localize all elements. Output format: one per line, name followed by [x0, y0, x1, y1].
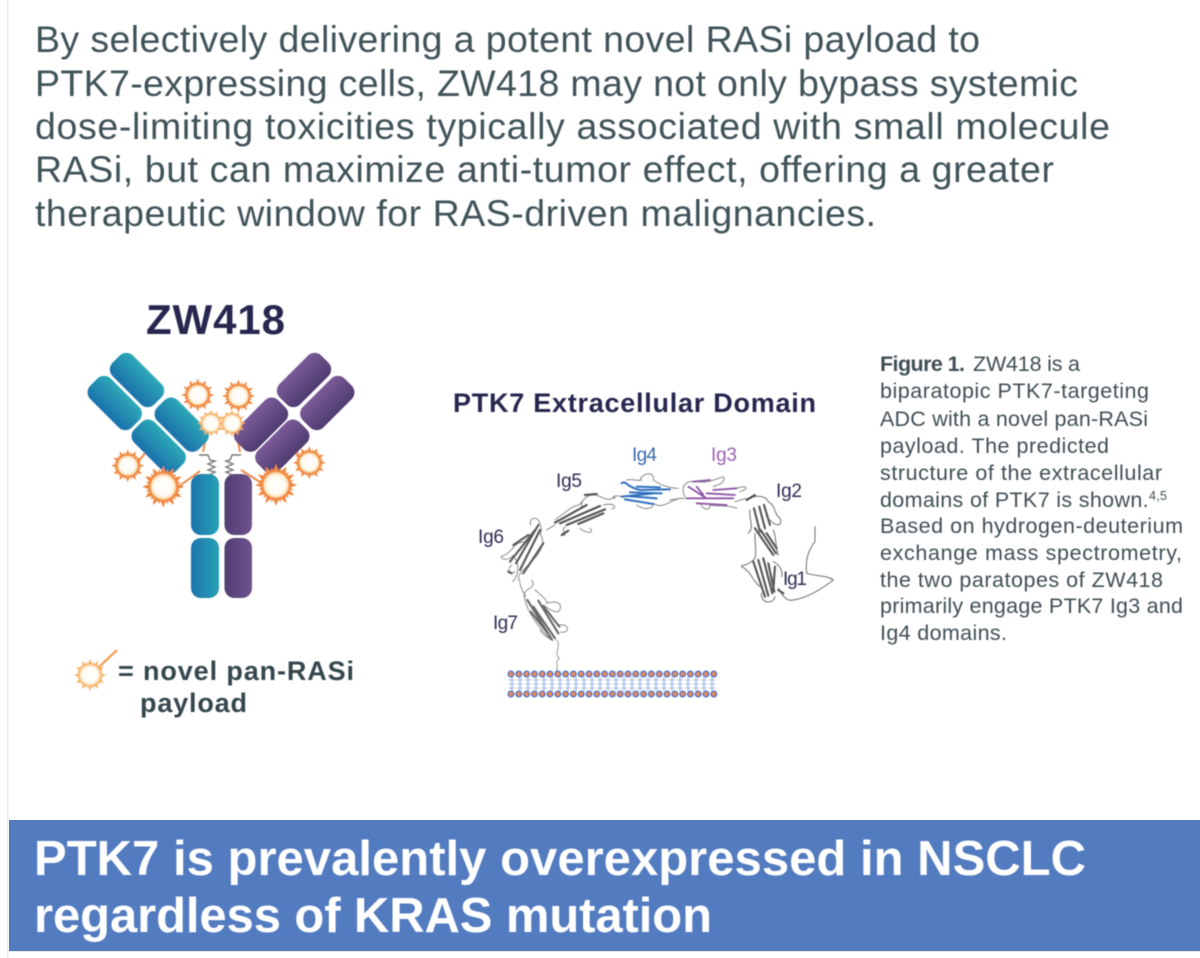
stem [191, 474, 252, 598]
right arm [230, 349, 358, 478]
domain labels: Ig5 [556, 471, 582, 492]
figure caption: domains of PTK7 is shown. [880, 488, 1149, 512]
figure caption: payload. The predicted [880, 434, 1109, 458]
domain Ig6 [501, 518, 555, 582]
diagram: PTK7 protein structure [478, 445, 833, 694]
domain labels [478, 445, 807, 634]
figure caption: biparatopic PTK7-targeting [880, 379, 1149, 403]
figure caption: the two paratopes of ZW418 [880, 568, 1163, 592]
hinge [199, 455, 241, 475]
domain labels: Ig2 [776, 481, 802, 502]
domain Ig4 [613, 474, 680, 509]
domain Ig7 [520, 580, 567, 672]
figure caption [880, 352, 1183, 645]
domain labels: Ig7 [493, 613, 518, 634]
figure caption: Based on hydrogen-deuterium [880, 514, 1183, 538]
domain labels: Ig4 [632, 445, 657, 466]
payload bursts [110, 378, 327, 509]
icon: payload burst [73, 650, 117, 692]
intro paragraph: therapeutic window for RAS-driven malignancies. [35, 192, 876, 234]
figure caption: 4,5 [1149, 489, 1167, 503]
intro paragraph: RASi, but can maximize anti-tumor effect, offering a greater [35, 148, 1054, 190]
figure caption: ADC with a novel pan-RASi [880, 407, 1148, 431]
figure caption: structure of the extracellular [880, 461, 1162, 485]
intro paragraph: dose-limiting toxicities typically associated with small molecule [35, 105, 1110, 147]
domain labels: Ig1 [783, 569, 807, 590]
diagram: ZW418 antibody [84, 349, 358, 598]
banner heading: regardless of KRAS mutation [34, 889, 712, 943]
figure caption: Figure 1. [880, 352, 965, 376]
banner heading [34, 832, 1086, 943]
linkers [138, 432, 300, 487]
domain labels: Ig6 [478, 527, 504, 548]
legend text [118, 656, 354, 718]
figure caption: primarily engage PTK7 Ig3 and [880, 594, 1183, 618]
banner [9, 820, 1200, 951]
intro paragraph: By selectively delivering a potent novel RASi payload to [35, 18, 980, 60]
banner heading: PTK7 is prevalently overexpressed in NSCLC [34, 832, 1086, 886]
domains Ig2 and Ig1 [741, 495, 833, 602]
figure caption: Ig4 domains. [880, 621, 1007, 645]
domain labels: Ig3 [711, 445, 737, 466]
legend text: = novel pan-RASi [118, 656, 354, 686]
heading: ZW418: ZW418 [146, 296, 285, 343]
heading: PTK7 extracellular domain: PTK7 Extracellular Domain [453, 388, 816, 418]
domain Ig5 [555, 494, 615, 536]
intro paragraph: PTK7-expressing cells, ZW418 may not only bypass systemic [35, 62, 1078, 104]
figure caption: ZW418 is a [973, 352, 1080, 376]
legend: payload [73, 650, 354, 718]
cell membrane [509, 674, 717, 694]
left arm [84, 349, 213, 478]
intro paragraph [35, 18, 1110, 234]
domain Ig3 [670, 477, 747, 509]
legend text: payload [140, 688, 247, 718]
figure caption: exchange mass spectrometry, [880, 541, 1182, 565]
